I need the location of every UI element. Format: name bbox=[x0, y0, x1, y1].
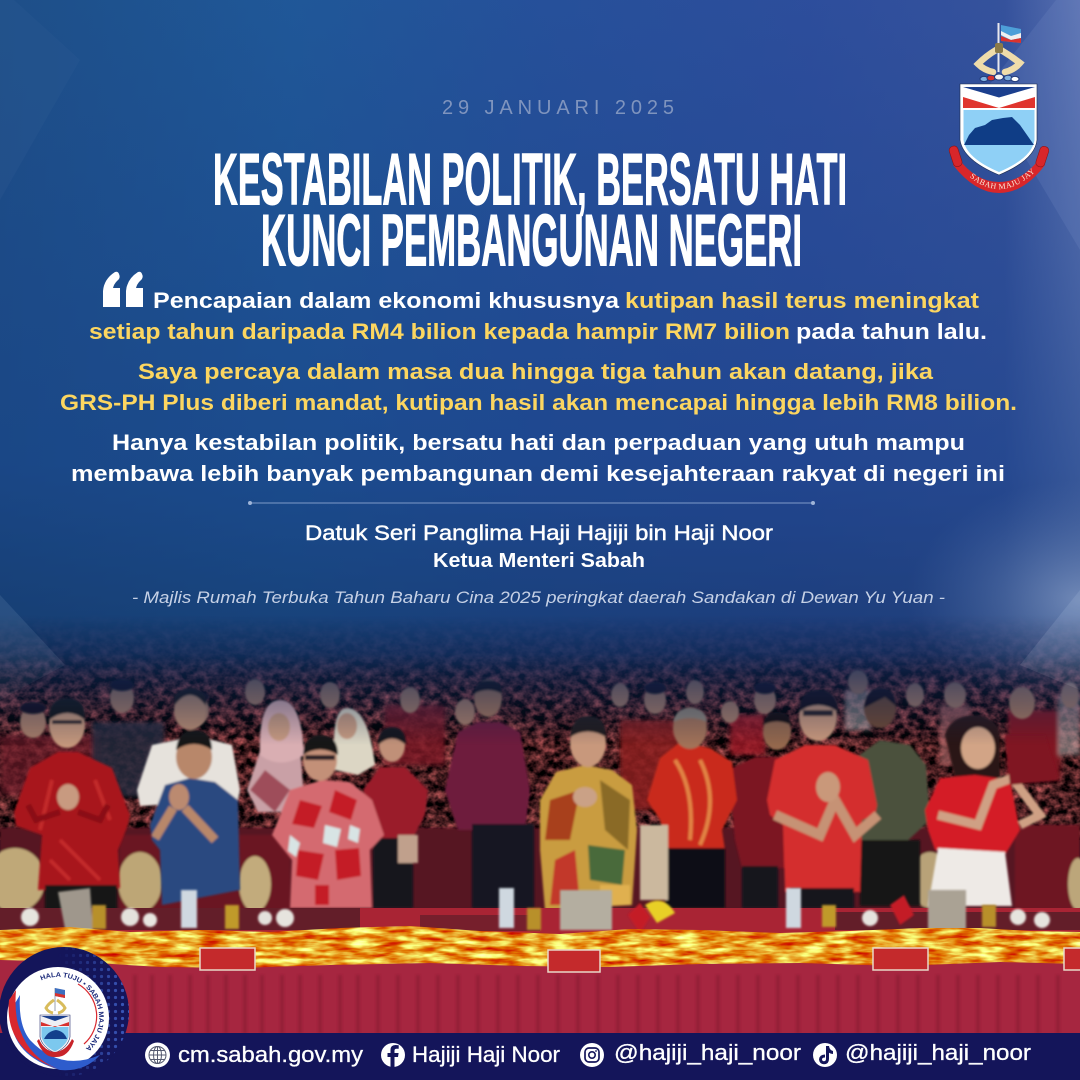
title bbox=[213, 140, 847, 282]
guest: woman in red top and white skirt bbox=[925, 715, 1040, 906]
footer: instagram: @hajiji_haji_noor bbox=[614, 1040, 801, 1065]
footer: website: cm.sabah.gov.my bbox=[178, 1042, 363, 1067]
guest: green shirt man bbox=[853, 688, 930, 906]
badge: Hala Tuju logo: HALA TUJU • SABAH MAJU JAYA bbox=[40, 972, 104, 1050]
footer bar bbox=[0, 1033, 1080, 1080]
quote: stability statement: membawa lebih banyak pembangunan demi kesejahteraan rakyat di negeri ini bbox=[71, 461, 1005, 486]
crest: Sabah coat of arms bbox=[948, 23, 1049, 193]
table cards and bottles bbox=[21, 888, 1050, 936]
icon: facebook bbox=[381, 1043, 405, 1067]
guest: maroon batik man bbox=[728, 712, 791, 908]
guest: batik chief minister bbox=[540, 716, 637, 910]
banquet table bbox=[0, 888, 1080, 964]
guest: far right maroon man bbox=[1005, 687, 1058, 785]
guest: red batik man bbox=[640, 707, 737, 908]
icon: tiktok bbox=[813, 1043, 837, 1067]
quote: revenue statement bbox=[89, 288, 987, 344]
guest: floral batik man bbox=[272, 735, 384, 908]
icon: quotation mark bbox=[103, 272, 143, 307]
background: blue gradient panel fading into the photo bbox=[0, 0, 1080, 750]
quote: stability statement: Hanya kestabilan politik, bersatu hati dan perpaduan yang utuh mampu bbox=[112, 430, 965, 455]
red table skirt with pleats bbox=[0, 960, 1080, 1034]
seated and standing guests bbox=[14, 679, 1058, 910]
quote: revenue statement: pada tahun lalu. bbox=[796, 319, 987, 344]
gold satin drape bbox=[0, 926, 1080, 968]
guest: red shirt man with glasses bbox=[767, 690, 878, 908]
speaker name and role bbox=[305, 522, 773, 572]
quote: stability statement bbox=[71, 430, 1005, 486]
guest: cream hijab woman bbox=[334, 708, 375, 775]
badge: Hala Tuju logo bbox=[0, 947, 129, 1076]
quote: forecast statement: Saya percaya dalam masa dua hingga tiga tahun akan datang, jika bbox=[138, 359, 934, 384]
footer: facebook: Hajiji Haji Noor bbox=[412, 1042, 560, 1067]
icon: small crest bbox=[37, 988, 74, 1057]
event caption: - Majlis Rumah Terbuka Tahun Baharu Cina 2025 peringkat daerah Sandakan di Dewan Yu Yuan - bbox=[132, 588, 945, 607]
icon: instagram bbox=[580, 1043, 604, 1067]
date: 29 JANUARI 2025 bbox=[442, 97, 674, 119]
quote: revenue statement: Pencapaian dalam ekonomi khususnya bbox=[153, 288, 620, 313]
guest: blue shirt man bbox=[150, 730, 240, 905]
speaker name and role: Datuk Seri Panglima Haji Hajiji bin Haji Noor bbox=[305, 522, 773, 545]
guest: maroon shirt man bbox=[445, 679, 534, 908]
footer: tiktok: @hajiji_haji_noor bbox=[845, 1040, 1031, 1065]
quote: forecast statement bbox=[60, 359, 1017, 415]
guest: maroon dress woman bbox=[363, 727, 428, 908]
quote: forecast statement: GRS-PH Plus diberi mandat, kutipan hasil akan mencapai hingga lebih RM8 bilion. bbox=[60, 390, 1017, 415]
quote: revenue statement: kutipan hasil terus meningkat bbox=[625, 288, 980, 313]
crowd in the background bbox=[0, 610, 1080, 840]
icon: globe bbox=[145, 1042, 170, 1068]
back table and chairs bbox=[0, 825, 1080, 912]
photo: audience and VIPs at the open house bbox=[0, 610, 1080, 1035]
name plates bbox=[200, 948, 1080, 972]
speaker name and role: Ketua Menteri Sabah bbox=[433, 550, 645, 572]
guest: red satin shirt man bbox=[14, 698, 130, 910]
quote: revenue statement: setiap tahun daripada RM4 bilion kepada hampir RM7 bilion bbox=[89, 319, 790, 344]
guest: white shirt man behind bbox=[137, 688, 240, 806]
guest: pink hijab woman bbox=[247, 700, 305, 812]
